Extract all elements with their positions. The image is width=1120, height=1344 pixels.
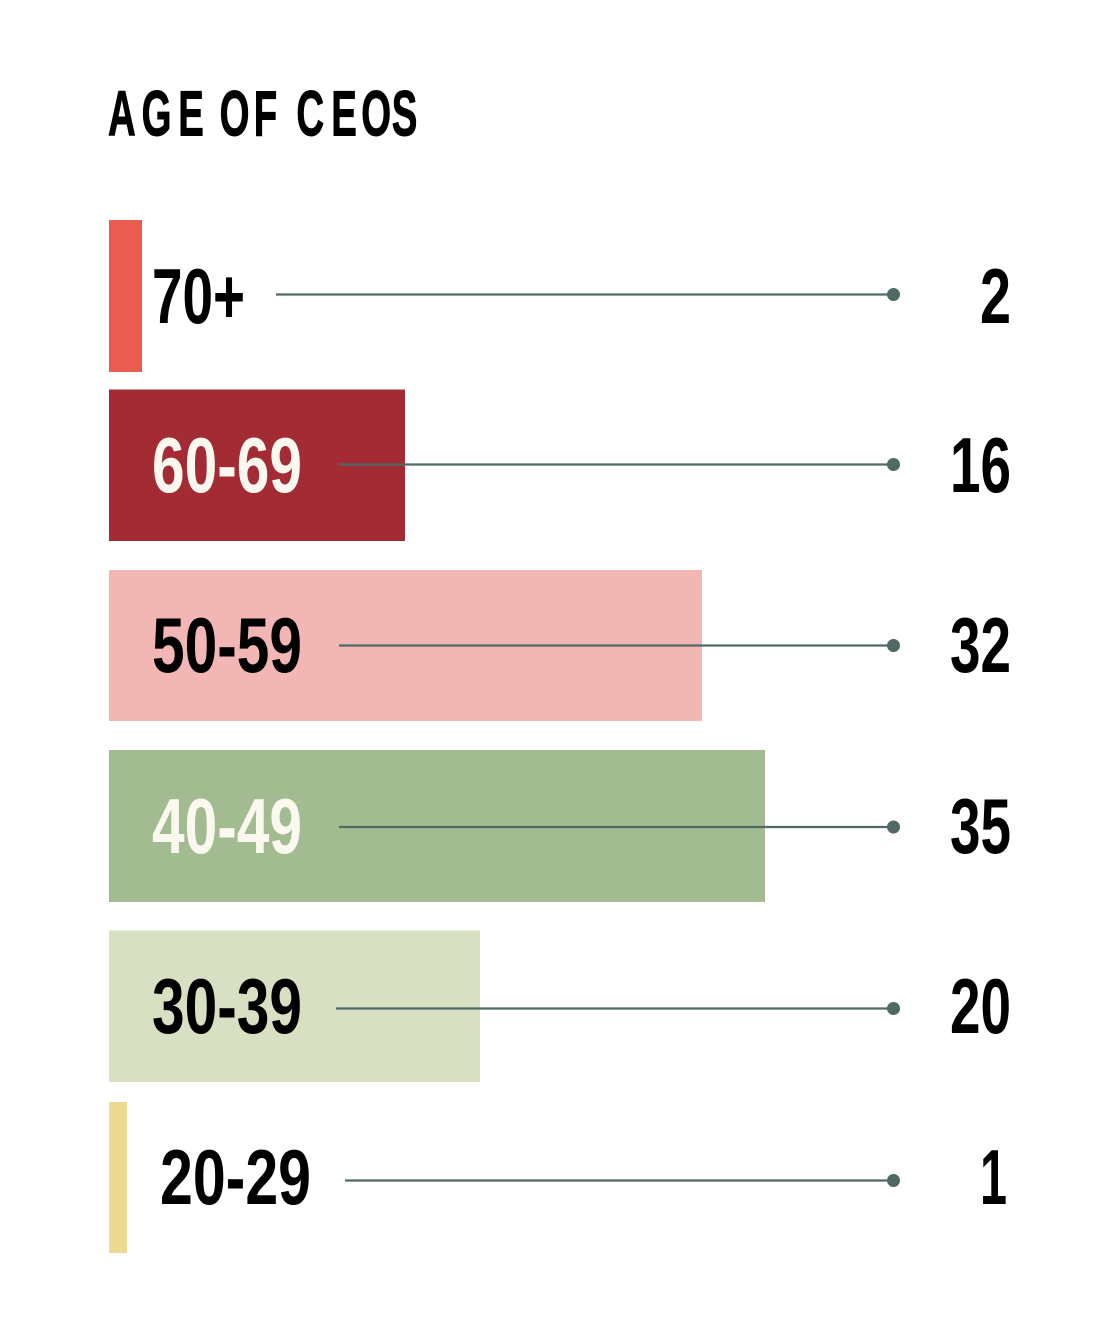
row: 30-39 bbox=[109, 930, 1011, 1082]
leader line: 20-29 bbox=[345, 1174, 900, 1187]
value: 20: 20 bbox=[950, 962, 1011, 1050]
value: 16: 16 bbox=[950, 421, 1011, 509]
row: 70+ bbox=[109, 220, 1011, 372]
value: 35: 35 bbox=[950, 782, 1011, 870]
label: 60-69: 60-69 bbox=[152, 421, 302, 509]
bar: 60-69 bbox=[109, 390, 405, 541]
label: 40-49: 40-49 bbox=[152, 782, 302, 870]
leader line: 70+ bbox=[276, 288, 900, 301]
bar: 20-29 bbox=[109, 1102, 127, 1253]
value: 1: 1 bbox=[980, 1133, 1007, 1221]
bar: 40-49 bbox=[109, 750, 765, 902]
bar chart bbox=[109, 220, 1011, 1253]
value: 32: 32 bbox=[950, 601, 1011, 689]
row: 40-49 bbox=[109, 750, 1011, 902]
label: 30-39: 30-39 bbox=[152, 962, 302, 1050]
leader line: 40-49 bbox=[339, 820, 900, 834]
label: 20-29: 20-29 bbox=[160, 1133, 311, 1221]
bar: 50-59 bbox=[109, 570, 702, 721]
leader line: 60-69 bbox=[339, 458, 900, 471]
row: 20-29 bbox=[109, 1102, 1007, 1253]
bar: 30-39 bbox=[109, 930, 480, 1082]
leader line: 50-59 bbox=[339, 639, 900, 652]
row: 60-69 bbox=[109, 390, 1011, 541]
row: 50-59 bbox=[109, 570, 1011, 721]
value: 2: 2 bbox=[980, 252, 1011, 340]
label: 70+: 70+ bbox=[152, 252, 245, 340]
title: AGE OF CEOS bbox=[108, 79, 417, 150]
label: 50-59: 50-59 bbox=[152, 601, 302, 689]
leader line: 30-39 bbox=[336, 1002, 900, 1015]
bar: 70+ bbox=[109, 220, 142, 372]
